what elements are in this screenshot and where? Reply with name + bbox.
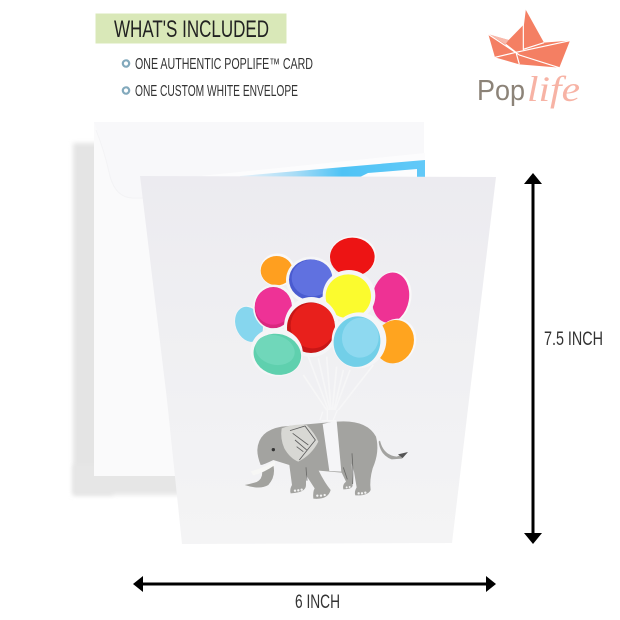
elephant toes	[294, 486, 366, 497]
logo wordmark: life: life	[527, 69, 580, 109]
heading: what's included: WHAT'S INCLUDED	[114, 16, 269, 43]
elephant trunk	[245, 465, 274, 487]
balloon: light blue left	[229, 302, 269, 346]
heading: what's included	[96, 14, 286, 44]
item: authentic card	[123, 56, 313, 73]
envelope flap	[94, 122, 424, 198]
item: white envelope: ONE CUSTOM WHITE ENVELOPE	[135, 83, 298, 100]
inner card peeking out	[200, 153, 425, 178]
elephant body	[257, 421, 377, 499]
balloons front row	[245, 297, 391, 382]
balloon: green	[245, 322, 308, 382]
elephant ear	[281, 425, 318, 462]
balloon: red centre	[284, 297, 339, 357]
logo: poplife	[477, 9, 580, 109]
width arrow	[133, 576, 496, 592]
balloon strings	[303, 357, 373, 410]
logo wordmark: Pop: Pop	[477, 75, 525, 107]
balloon: pink left	[253, 285, 295, 330]
icon: origami boat	[488, 9, 570, 68]
balloon: yellow	[323, 270, 375, 321]
height arrow	[524, 173, 542, 544]
balloons back row	[229, 236, 423, 369]
balloon knot	[320, 410, 337, 421]
elephant leg shading	[306, 453, 353, 484]
envelope with shadow	[73, 122, 424, 495]
width label: 6 INCH	[295, 591, 340, 613]
item: white envelope	[123, 83, 298, 100]
included items list	[123, 56, 313, 100]
elephant tusk	[251, 461, 275, 475]
illustration: balloons	[229, 236, 423, 410]
balloon: red top	[330, 236, 376, 276]
elephant eye	[272, 448, 275, 451]
balloon: pink right	[368, 268, 416, 326]
illustration: elephant	[245, 410, 408, 499]
greeting card	[140, 176, 496, 544]
item: authentic card: ONE AUTHENTIC POPLIFE™ CARD	[135, 56, 313, 73]
balloons middle row	[253, 257, 375, 330]
balloon: light blue centre	[327, 308, 391, 373]
balloon: blue	[286, 257, 336, 303]
elephant harness	[323, 421, 341, 472]
balloon: orange top left	[260, 253, 295, 287]
elephant tail	[379, 441, 407, 459]
balloon: orange right	[369, 313, 423, 369]
